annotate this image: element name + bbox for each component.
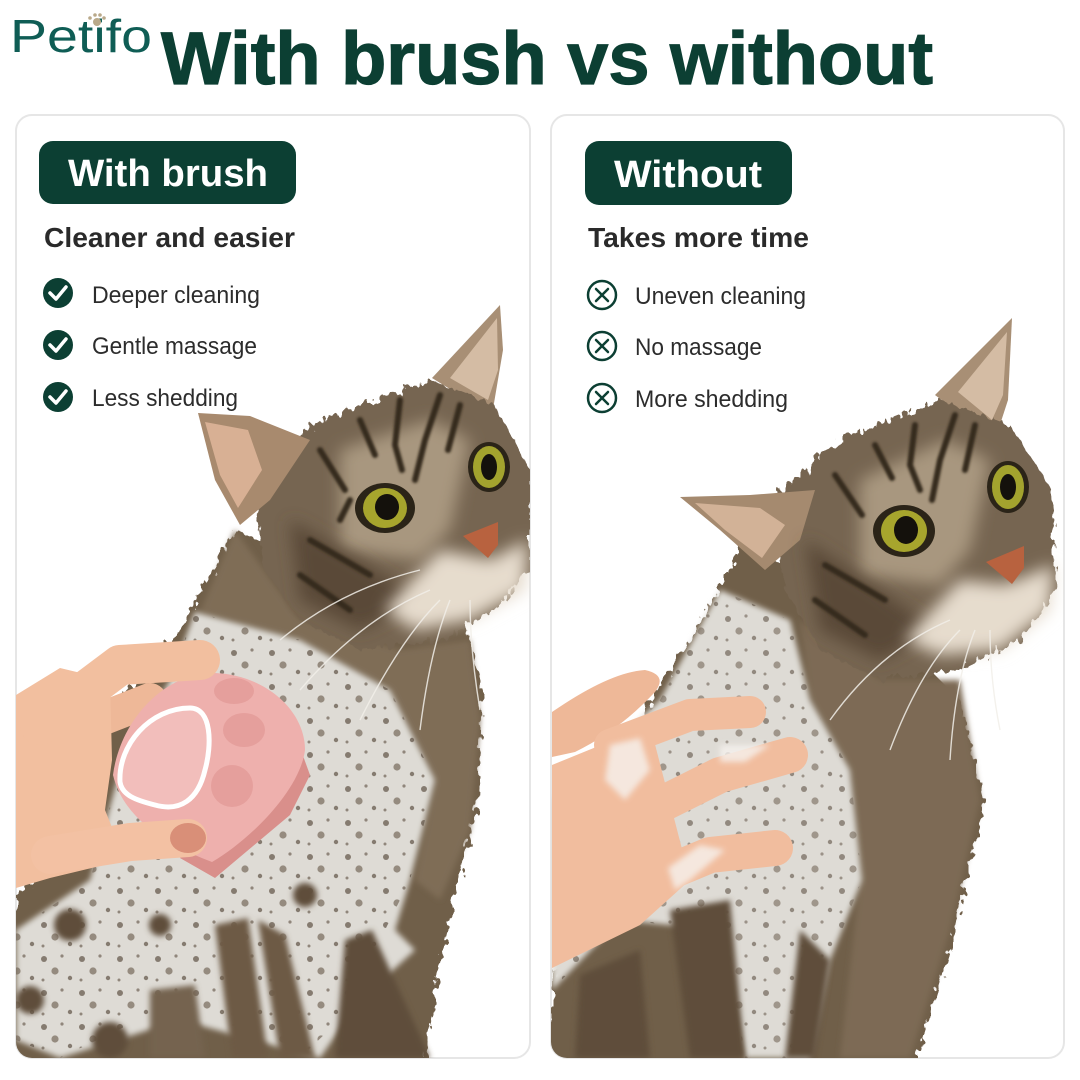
muzzle bbox=[905, 565, 1054, 655]
brush cap bbox=[120, 708, 209, 807]
list item: more shedding: More shedding bbox=[635, 386, 788, 413]
illustration: cat without brush bbox=[552, 318, 1056, 1064]
subheading: Cleaner and easier bbox=[44, 222, 295, 253]
cat ear back bbox=[432, 305, 503, 415]
inner ear left bbox=[695, 503, 785, 558]
list item: deeper cleaning bbox=[43, 278, 260, 309]
brush nubs bbox=[211, 678, 265, 807]
chest foam bbox=[16, 612, 435, 1058]
eye left bbox=[873, 505, 935, 557]
inner ear bbox=[450, 318, 498, 400]
list item: gentle massage bbox=[43, 330, 257, 360]
hand behind bbox=[552, 670, 660, 757]
brush bristles bbox=[180, 758, 310, 878]
list item: no massage bbox=[588, 332, 762, 361]
brush body bbox=[113, 673, 305, 862]
hand holding brush bbox=[16, 660, 206, 888]
panel: with brush bbox=[10, 115, 530, 1064]
chest foam bbox=[552, 590, 862, 1058]
subheading: Takes more time bbox=[588, 222, 809, 253]
second finger bbox=[110, 683, 164, 734]
eye right bbox=[987, 461, 1029, 513]
list item: uneven cleaning: Uneven cleaning bbox=[635, 283, 806, 310]
eye right bbox=[468, 442, 510, 492]
cat head bbox=[770, 400, 1056, 680]
badge: without bbox=[585, 141, 792, 205]
list item: deeper cleaning: Deeper cleaning bbox=[92, 282, 260, 309]
cat head bbox=[250, 380, 530, 650]
foam on hand bbox=[605, 738, 770, 890]
wet fur clumps bbox=[575, 900, 830, 1058]
face lights bbox=[340, 420, 470, 560]
whiskers bbox=[830, 620, 1000, 760]
wet fur clumps bbox=[16, 883, 430, 1058]
hand on cat bbox=[552, 712, 790, 968]
head stripes bbox=[815, 415, 975, 635]
face lights bbox=[860, 440, 990, 585]
nose bbox=[463, 522, 498, 558]
neck ruff bbox=[200, 530, 480, 900]
ear left bbox=[198, 413, 310, 525]
cat body bbox=[552, 540, 985, 1064]
inner ear bbox=[958, 332, 1007, 420]
illustration: cat with brush bbox=[10, 305, 530, 1064]
logo: Petifo bbox=[10, 10, 152, 62]
cheek fur dark bbox=[804, 543, 921, 662]
muzzle bbox=[385, 540, 528, 630]
list item: gentle massage: Gentle massage bbox=[92, 333, 257, 360]
neck ruff bbox=[800, 620, 980, 1058]
badge: with brush: With brush bbox=[68, 153, 268, 195]
head stripes bbox=[300, 395, 460, 610]
whiskers bbox=[280, 570, 480, 730]
badge: with brush bbox=[39, 141, 296, 204]
title: With brush vs without bbox=[161, 17, 933, 100]
nose bbox=[986, 546, 1024, 584]
list item: less shedding: Less shedding bbox=[92, 385, 238, 412]
list item: no massage: No massage bbox=[635, 334, 762, 361]
cat body bbox=[10, 530, 482, 1064]
panel: without bbox=[551, 115, 1064, 1064]
cheek fur dark bbox=[288, 522, 403, 632]
list item: more shedding bbox=[588, 384, 788, 413]
badge: without: Without bbox=[614, 154, 762, 196]
eye left bbox=[355, 483, 415, 533]
cat ear back bbox=[935, 318, 1012, 422]
list item: less shedding bbox=[43, 382, 238, 412]
ear left bbox=[680, 490, 815, 570]
inner ear left bbox=[205, 422, 262, 508]
